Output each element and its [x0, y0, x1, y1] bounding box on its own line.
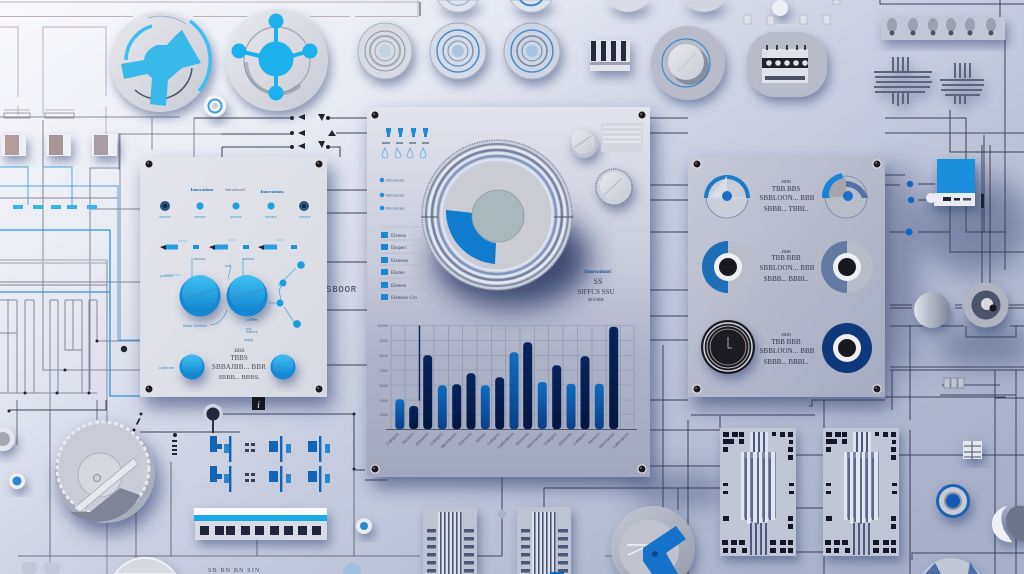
callout captions: unit — [225, 264, 232, 268]
callout captions: nut — [246, 327, 252, 331]
gauge middle left — [702, 241, 754, 293]
wiring junction dots — [24, 340, 127, 394]
big toothed dial — [55, 422, 155, 523]
x-axis labels: Mechanism — [440, 431, 458, 449]
heat sink module right — [823, 428, 899, 556]
dark hanging plug — [203, 404, 223, 433]
right panel face — [688, 157, 885, 397]
panel: centre data panel — [367, 107, 650, 477]
x-axis labels: Elements — [557, 431, 573, 447]
dial hub — [78, 453, 122, 497]
legend dots — [380, 178, 404, 210]
left panel body text: SBBB... BBBS. — [218, 374, 260, 381]
dark connector dots — [8, 410, 356, 470]
left panel body text: TBBS — [230, 354, 248, 362]
gauge middle right — [821, 241, 873, 293]
right panel text middle: SBBLOON... BBB — [759, 264, 815, 272]
left panel headings — [191, 187, 284, 194]
callout captions: sensor — [243, 257, 255, 261]
heat sink module left — [720, 428, 796, 556]
bar chart — [377, 324, 637, 450]
callout captions: battery — [246, 330, 258, 334]
x-axis labels: Elements — [514, 431, 530, 447]
x-axis labels: Category — [572, 431, 587, 446]
bottom sphere — [343, 563, 361, 574]
legend squares: Elemen — [391, 234, 407, 239]
small knob caption: Calibrate — [158, 365, 175, 370]
y-axis labels: 5000 — [380, 399, 388, 403]
cyan bus bar connector — [194, 508, 327, 540]
right panel text middle: .BBB — [781, 249, 791, 254]
terminal plate — [747, 32, 827, 97]
donut chart — [421, 140, 573, 290]
switch housings — [1, 134, 117, 156]
blue ring socket — [936, 484, 970, 518]
right panel text top: TBB BBS — [772, 185, 800, 193]
right panel text bottom: .BBB — [781, 332, 791, 337]
chart grid — [391, 326, 634, 429]
right panel text top: SBBB... TBBL. — [764, 205, 808, 213]
left panel headings: Innovations — [261, 189, 284, 194]
callout captions: setup — [244, 338, 253, 342]
x-axis labels — [385, 431, 630, 450]
panel: right gauge panel — [688, 157, 885, 397]
y-axis labels: 7000 — [380, 369, 388, 373]
dial plate with knob — [651, 26, 725, 100]
x-axis labels: Elements — [414, 431, 430, 447]
partial top lenses and caps — [437, 0, 788, 16]
lens one — [358, 23, 412, 79]
small side circle — [0, 427, 15, 451]
x-axis labels: Calibrations — [496, 431, 515, 450]
lens button — [964, 282, 1008, 328]
callout captions: sensor — [246, 318, 258, 322]
chip components — [874, 57, 984, 106]
donut ring — [445, 163, 551, 269]
x-axis labels: Sensor — [474, 431, 487, 444]
wiring: top-left mauve lines — [0, 0, 420, 135]
donut metal rings — [422, 140, 572, 290]
bottom heat sink right — [517, 507, 571, 574]
small stacked block — [963, 441, 982, 459]
faint notes box — [601, 123, 643, 152]
x-axis labels: Mechanism — [526, 431, 544, 449]
x-axis labels: Category — [429, 431, 444, 446]
lens two — [430, 23, 486, 79]
blue status dots — [905, 181, 914, 236]
bottom heat sink left — [423, 507, 477, 574]
callout captions — [160, 257, 258, 342]
centre panel caption: BOOBB — [588, 297, 604, 302]
dial: cyan rotary knob — [110, 12, 210, 112]
dial face — [57, 422, 149, 514]
right panel text bottom: SBBB... BBBL. — [764, 358, 809, 366]
partial fan bottom right — [922, 558, 980, 574]
callout lines — [164, 240, 296, 325]
x-axis labels: Sensors — [587, 431, 601, 445]
right panel text middle — [759, 249, 815, 283]
dial lower shade — [70, 488, 140, 522]
y-axis labels — [377, 324, 388, 417]
probe icons — [160, 244, 297, 250]
mid tiny marks — [245, 443, 255, 482]
ribbed round knob — [596, 169, 632, 205]
gauge clock dial — [701, 320, 755, 374]
grey cylinder cap — [914, 292, 950, 328]
dial lever — [74, 458, 138, 512]
indicator captions: sensor — [299, 215, 311, 219]
centre panel caption: Innovations! — [585, 270, 612, 275]
bottom caption strip: SB BN BN SIN — [208, 568, 261, 574]
donut chart shadow — [434, 208, 590, 308]
legend squares: Eksten — [391, 271, 405, 276]
grey cylinder bottom right — [992, 506, 1024, 542]
small blue indicator button — [204, 95, 226, 117]
x-axis labels: Elements — [457, 431, 473, 447]
indicator dots row — [160, 201, 309, 211]
bus bar slots — [200, 526, 321, 535]
y-axis labels: 8000 — [380, 354, 388, 358]
gauge top right — [822, 173, 868, 218]
indicator captions: sensor — [230, 215, 242, 219]
x-axis labels: Mechanism — [598, 431, 616, 449]
legend squares: Eksperi — [391, 246, 407, 251]
legend squares: Elemens — [391, 259, 408, 264]
callout captions: position — [160, 274, 173, 278]
y-axis labels: 10000 — [377, 324, 388, 328]
right panel text bottom — [759, 332, 815, 366]
partial bottom fan left — [115, 558, 175, 574]
y-axis labels: 6000 — [380, 384, 388, 388]
right panel text bottom: TBB BBB — [771, 338, 801, 346]
left panel body text — [212, 349, 266, 381]
bottom blue rotary dial — [611, 506, 695, 574]
gauge top left — [704, 175, 750, 218]
gauge navy dial — [822, 323, 872, 373]
small nodes — [276, 261, 305, 328]
chart axis — [386, 428, 637, 430]
ring ticks — [421, 216, 573, 218]
right panel screws — [692, 159, 882, 394]
callout captions: sensor — [194, 257, 206, 261]
indicator captions — [159, 215, 311, 219]
small connector icon right — [944, 378, 964, 388]
knob rings — [126, 16, 210, 99]
bottom-edge blue accent — [550, 572, 564, 574]
donut blue segment — [446, 210, 496, 264]
blue relay box — [926, 159, 984, 208]
legend dots: Introduced — [386, 194, 404, 198]
indicator captions: sensor — [194, 215, 206, 219]
panel: left control panel — [140, 157, 327, 397]
callout captions: Basic Solution — [183, 324, 207, 328]
right panel text middle: TBB BBB — [771, 254, 801, 262]
left panel body text: SBBAJBB... BBR — [212, 363, 266, 371]
bottom rounded squares — [22, 562, 60, 574]
blue schematic symbols — [210, 436, 330, 492]
small blue button left — [9, 473, 25, 489]
junction marker — [498, 510, 506, 518]
x-axis labels: Category — [486, 431, 501, 446]
legend squares: Elemens Cro — [391, 296, 417, 301]
left panel headings: Introduced — [225, 187, 245, 192]
x-axis labels: Sensors — [401, 431, 415, 445]
knob cyan blade — [121, 30, 201, 106]
blue gear icons — [382, 128, 429, 143]
dial: cyan four-node connector — [226, 9, 328, 111]
right panel text bottom: SBBLOON... BBB — [759, 347, 815, 355]
small blue button centre — [356, 518, 372, 534]
marker line — [419, 326, 420, 400]
small connector tabs — [744, 0, 840, 25]
wiring: left circuit lines — [0, 117, 290, 574]
info tag under left panel: i — [257, 400, 260, 411]
directional arrow markers — [290, 114, 336, 149]
right panel text top: .BBB — [781, 179, 791, 184]
small round knob — [570, 130, 598, 158]
large cyan knobs — [180, 275, 268, 316]
donut hole — [472, 190, 524, 242]
left panel body text: .BBB — [233, 349, 245, 354]
x-axis labels: Category — [385, 431, 400, 446]
legend squares — [381, 227, 430, 302]
heading text: stray label SBOOR: SBOOR — [326, 285, 357, 295]
shadow: right-side ambient darkening — [630, 160, 1024, 506]
top-right peg bar — [881, 17, 1005, 40]
centre panel face — [367, 107, 650, 477]
right panel text middle: SBBB... BBBL. — [764, 275, 809, 283]
left panel screws — [144, 159, 324, 394]
x-axis labels: Calibrations — [611, 431, 630, 450]
lens row — [358, 23, 560, 79]
legend dots: Introduced — [386, 206, 404, 210]
y-axis labels: 4000 — [380, 413, 388, 417]
cyan terminal dashes — [13, 205, 97, 209]
droplet icons — [382, 148, 426, 158]
lens three — [504, 23, 560, 79]
centre panel caption: SS — [594, 277, 602, 286]
wiring: left blue lines — [0, 167, 140, 396]
connector rings — [244, 27, 310, 94]
switch block — [590, 40, 630, 71]
legend dots: Introduced — [386, 178, 404, 182]
bars — [395, 327, 618, 429]
centre panel caption — [577, 270, 615, 302]
right panel text top: SBBLOON... BBB — [759, 194, 815, 202]
y-axis labels: 9000 — [380, 339, 388, 343]
left panel face — [140, 157, 327, 397]
centre panel caption: SIFFCS SSU — [577, 288, 615, 296]
small cyan knobs — [180, 354, 296, 380]
left panel headings: Innovations — [191, 187, 214, 192]
indicator captions: sensor — [265, 215, 277, 219]
x-axis labels: Category — [543, 431, 558, 446]
connector arms and hub — [232, 14, 317, 100]
indicator captions: sensor — [159, 215, 171, 219]
centre panel screws — [370, 110, 647, 474]
right panel text top — [759, 179, 815, 213]
info tag under left panel — [252, 397, 265, 411]
legend squares: Elemen — [391, 284, 407, 289]
